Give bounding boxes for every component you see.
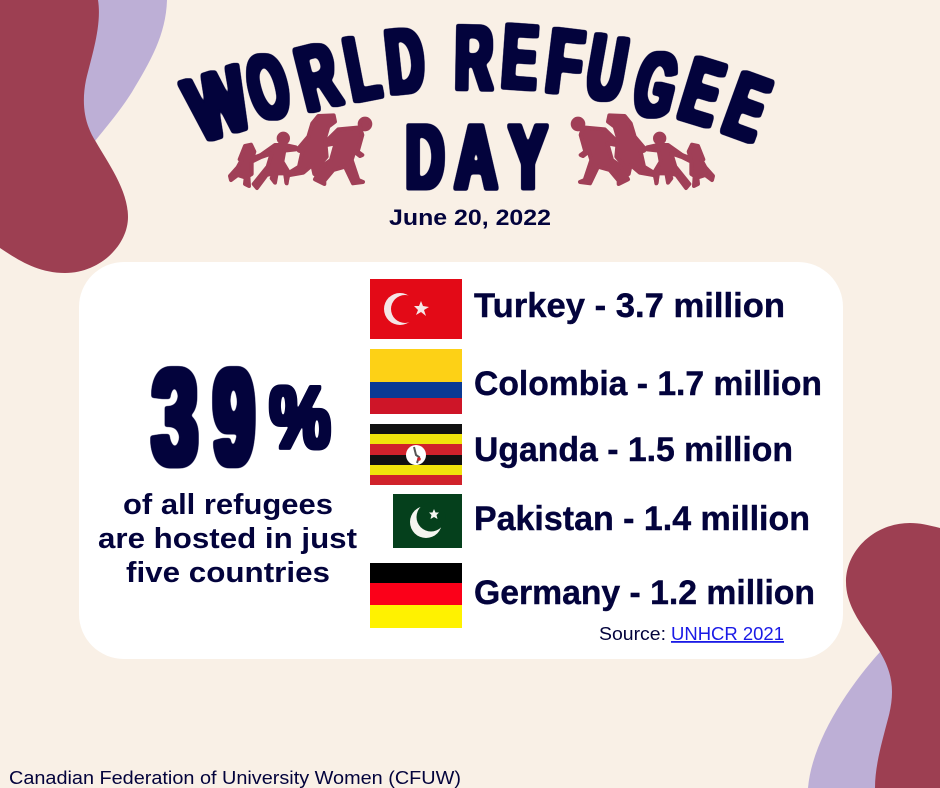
flag: Germany (370, 563, 462, 628)
flag: Colombia (370, 349, 462, 414)
title: World Refugee Day: D (381, 8, 429, 114)
title: World Refugee Day: U (580, 14, 634, 122)
title: World Refugee Day: E (670, 37, 734, 146)
flag: Uganda (370, 424, 462, 485)
title: World Refugee Day: R (454, 6, 494, 109)
big stat: 39% (152, 340, 331, 494)
text: stat description (98, 489, 357, 589)
label: Colombia: Colombia - 1.7 million (474, 365, 822, 403)
title: World Refugee Day: Y (509, 107, 547, 209)
panel: white card (79, 262, 843, 659)
text: stat description: of all refugees (123, 489, 333, 521)
title: World Refugee Day: L (337, 14, 387, 121)
blob: top-left maroon (0, 0, 128, 273)
title: World Refugee Day: A (455, 106, 497, 209)
title: World Refugee Day: E (713, 52, 781, 161)
text: stat description: five countries (126, 557, 330, 589)
footer credit: Canadian Federation of University Women (CFUW) (9, 768, 461, 788)
icon: fleeing family right (573, 115, 713, 188)
title: World Refugee Day: W (174, 46, 263, 162)
source line (599, 624, 784, 644)
title: World Refugee Day: O (236, 32, 300, 142)
text: stat description: are hosted in just (98, 523, 357, 555)
title: World Refugee Day: R (287, 22, 349, 131)
title: World Refugee Day (174, 4, 781, 209)
big stat: 39%: 3 (152, 340, 198, 493)
label: Turkey: Turkey - 3.7 million (474, 287, 785, 325)
blob: top-left lavender (80, 0, 167, 145)
title: World Refugee Day: E (499, 4, 541, 109)
source line: Source: (599, 624, 666, 644)
label: Germany: Germany - 1.2 million (474, 574, 815, 612)
title: World Refugee Day: F (541, 10, 588, 116)
title: World Refugee Day: G (625, 30, 687, 140)
big stat: 39%: % (269, 369, 331, 467)
blob: bottom-right lavender (808, 652, 900, 788)
date: June 20, 2022 (389, 205, 551, 230)
title: World Refugee Day: D (406, 105, 444, 208)
flag: Turkey (370, 279, 462, 339)
blob: bottom-right maroon (846, 523, 940, 788)
label: Pakistan: Pakistan - 1.4 million (474, 500, 810, 538)
label: Uganda: Uganda - 1.5 million (474, 431, 793, 469)
big stat: 39%: 9 (214, 342, 254, 494)
icon: fleeing family left (230, 115, 370, 188)
flag: Pakistan (393, 494, 462, 548)
source line: UNHCR 2021 (671, 624, 784, 644)
